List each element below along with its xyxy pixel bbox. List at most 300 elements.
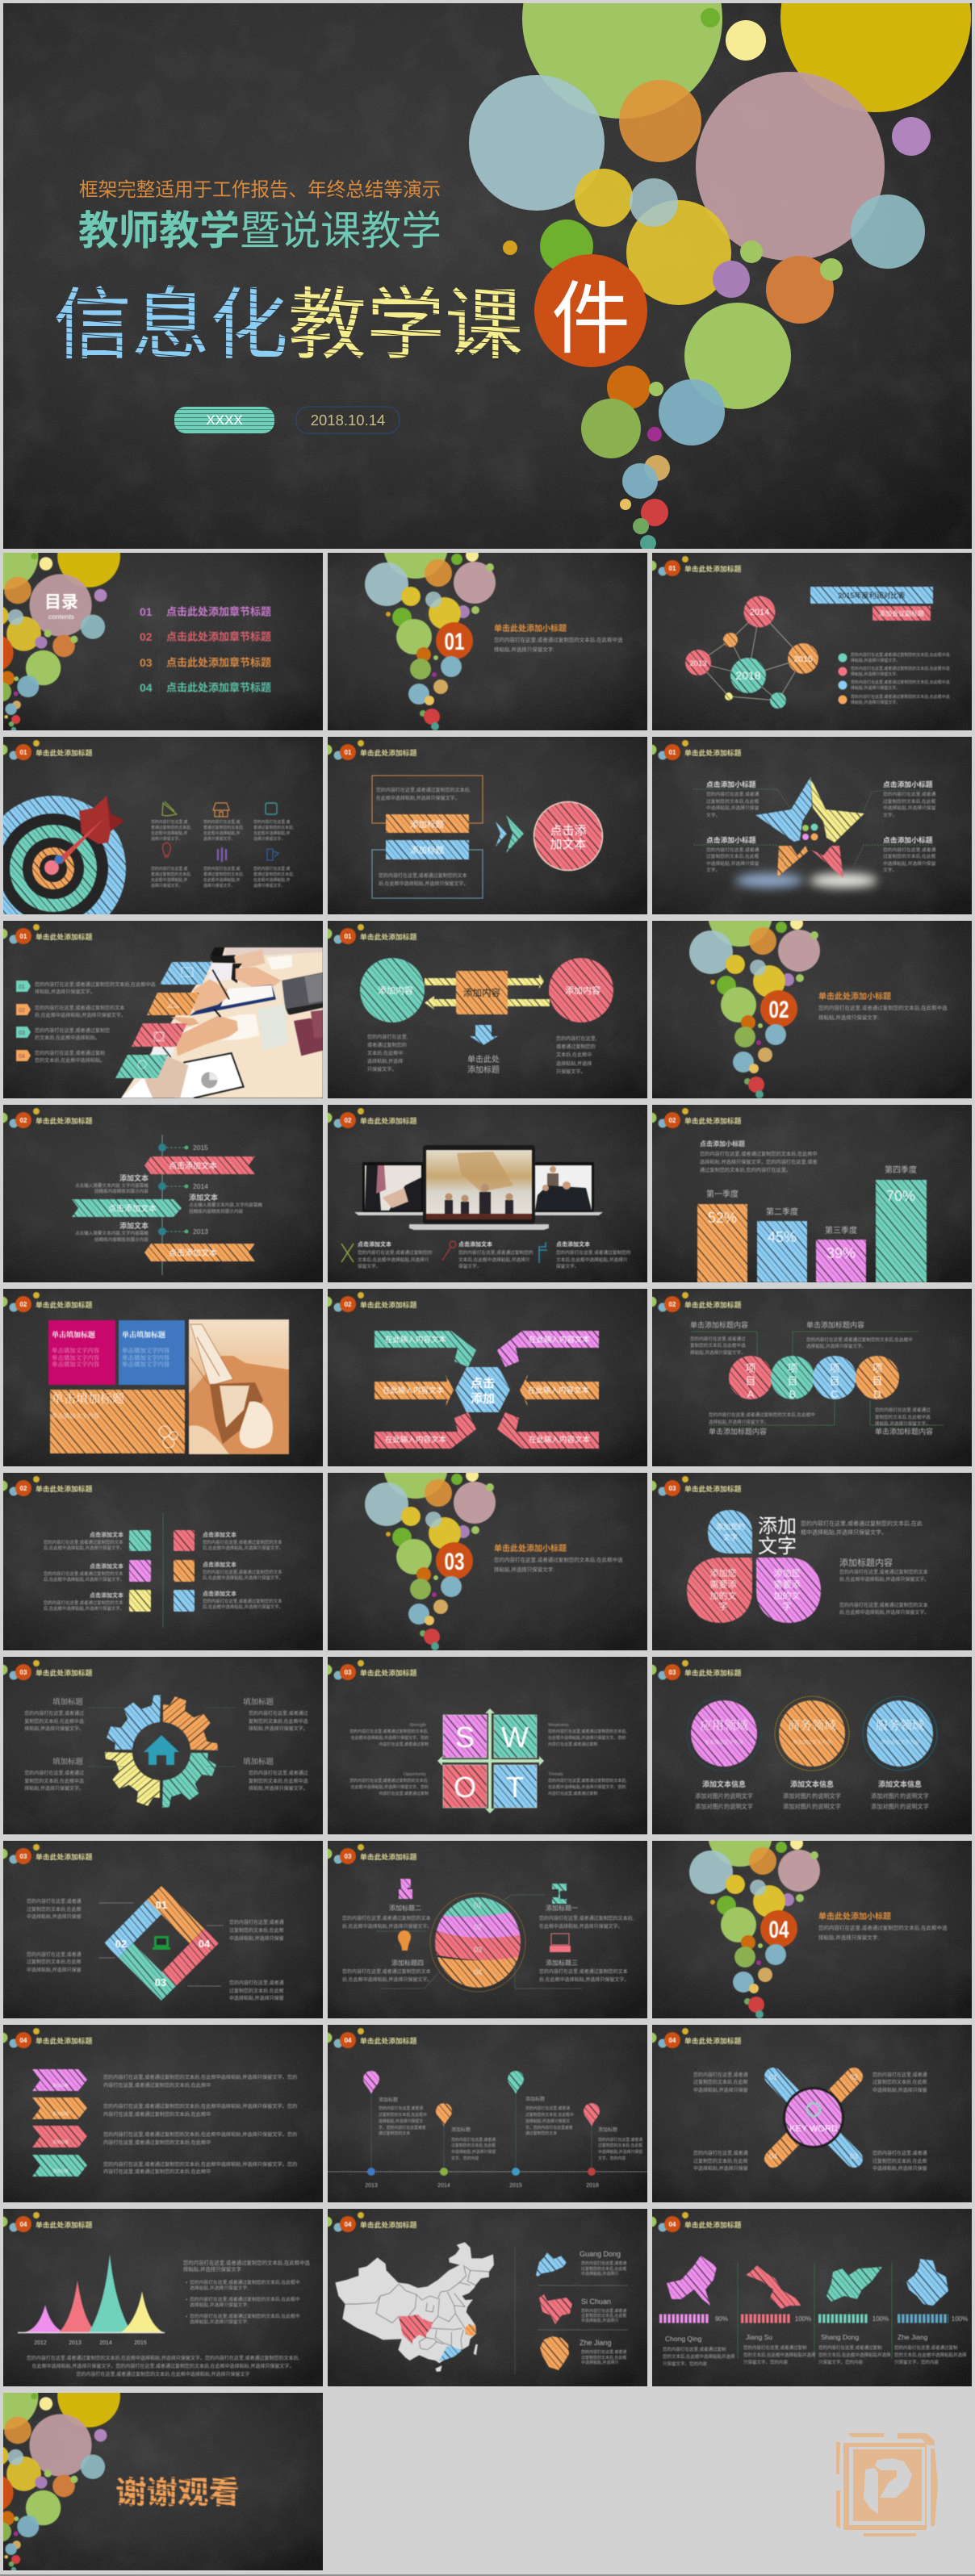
panel: thank you slide <box>0 2364 323 2572</box>
layered circle: 01 <box>474 1901 482 1909</box>
milestone 2018 text: 过复制您的文本后,在此框 <box>598 2143 642 2148</box>
panel: icon grid slide <box>0 1473 323 1650</box>
SWOT quadrants: W <box>501 1721 529 1754</box>
section number: 03 <box>444 1549 465 1575</box>
bottom left text <box>693 2150 748 2172</box>
slide header: 单击此处添加标题 <box>360 1852 417 1861</box>
text block 2014 right: 括精炼内容精炼到展示内容 <box>189 1208 244 1215</box>
region Shandong: 您的内容打在这里,或者通过复制 <box>818 2344 882 2351</box>
icon captions: 选择只保留文字。 <box>151 883 182 889</box>
right text: 您的内容打在这里, <box>556 1035 597 1042</box>
slide header <box>321 1660 417 1680</box>
left text rows: 后,在此框中选择粘贴,并选择只保留文字。 <box>44 1576 124 1583</box>
section number: 04 <box>768 1917 789 1943</box>
field captions: 添加对图片的说明文字 <box>695 1792 753 1800</box>
top description <box>801 1520 923 1536</box>
bottom left text: 点击添加小标题 <box>706 835 756 844</box>
arrow: pink bottom right <box>497 1412 599 1449</box>
bar chart: 第三季度 <box>825 1225 857 1236</box>
strength text: 您的内容打在这里,或者通过复制您的文本后, <box>349 1729 429 1734</box>
top left text: 中选择粘贴,并选择只保留 <box>693 2087 748 2093</box>
layered circle: 02 <box>474 1923 482 1931</box>
arrow: orange right: 在此输入内容文本 <box>528 1386 589 1395</box>
timeline years: 2015 <box>193 1144 208 1152</box>
field captions: 添加对图片的说明文字 <box>783 1792 841 1800</box>
legend list: 您的内容打在这里,或者通过复制您的文本后,在此框中选 <box>851 680 950 685</box>
slide header: 单击此处添加标题 <box>684 748 742 757</box>
orange centre box: 添加内容 <box>463 987 500 998</box>
top right callout: 单击添加标题内容 <box>806 1320 864 1329</box>
blue outline box: 后,在此框中选择粘贴,并选择只保留文字。 <box>379 880 468 887</box>
top right callout <box>806 1320 913 1349</box>
icon captions: 选择只保留文字。 <box>151 836 182 842</box>
top left callout: 择粘贴,并选择只保留文字。 <box>690 1349 746 1356</box>
left text rows: 后,在此框中选择粘贴,并选择只保留文字。 <box>44 1605 124 1612</box>
slide header <box>321 740 417 760</box>
orange outline box: 在此框中选择粘贴,并选择只保留文字。 <box>376 795 460 801</box>
years: 2014 <box>437 2183 450 2189</box>
circle callout: 点击添 <box>550 824 587 838</box>
opportunity text: 在此框中选择粘贴,并选择只保留文字。您的 <box>351 1784 429 1790</box>
section body text: 择粘贴,并选择只保留文字; <box>494 1566 554 1573</box>
main title last character in circle: 件 <box>551 274 630 363</box>
contents list: 02 <box>140 630 153 643</box>
milestone 2014 text: 中选择粘贴,并选择只保留 <box>451 2149 496 2155</box>
feature 2 text: 点击添加文本 <box>458 1240 492 1248</box>
pink ribbon: 点击添加文本 <box>169 1160 217 1171</box>
peak chart: 2014 <box>99 2340 112 2346</box>
heading one: 添加标题一 <box>546 1904 578 1912</box>
cross arms: 03 <box>850 2152 858 2160</box>
region Shandong: 100% <box>872 2315 889 2323</box>
slide header: 02 <box>20 1301 27 1308</box>
region Jiangsu <box>741 2265 816 2365</box>
bottom left text: 中选择粘贴,并选择只保留 <box>706 860 759 867</box>
right text rows: 点击添加文本 <box>203 1561 236 1568</box>
legend list: 择粘贴,并选择只保留文字。 <box>851 671 900 677</box>
list item 01: 01 <box>19 985 25 990</box>
list item 03: 的文本后,在此框中选择粘贴。 <box>35 1035 100 1041</box>
slide header: 单击此处添加标题 <box>684 564 742 573</box>
icon captions: 您的内容打在这里,或 <box>203 866 240 872</box>
panel: pin timeline slide <box>321 2025 647 2202</box>
bottom right text: 择粘贴,并选择只保留文字。 <box>249 1785 308 1792</box>
region Jiangsu: Jiang Su <box>746 2333 772 2341</box>
weakness text <box>548 1723 627 1747</box>
list item 03 <box>16 1027 110 1041</box>
slide header: 单击此处添加标题 <box>684 1300 742 1309</box>
feature 3 text <box>556 1240 631 1269</box>
region Zhejiang: 100% <box>952 2315 968 2323</box>
contents list: 点击此处添加章节标题 <box>166 657 271 668</box>
network nodes <box>685 596 818 709</box>
item circles: 目 <box>745 1375 756 1387</box>
slide header: 02 <box>345 1117 352 1124</box>
slide header <box>0 1292 93 1312</box>
slide header: 03 <box>20 1853 27 1860</box>
orange outline box: 您的内容打在这里,或者通过复制您的文本后, <box>376 787 471 793</box>
right text: 选择粘贴,并选择 <box>556 1060 592 1067</box>
petal: violet: 需要添 <box>773 1579 801 1590</box>
top right callout: 您的内容打在这里,或者通过复制您的文本后,在此框中 <box>806 1336 913 1343</box>
top right text: 中选择粘贴,并选择只保留 <box>883 805 936 811</box>
orange ribbon: 点击添加文本 <box>169 1248 217 1258</box>
panel: section 02 divider <box>652 882 972 1098</box>
right text rows: 点击添加文本 <box>203 1531 236 1538</box>
keyword ellipse <box>783 2087 844 2148</box>
icon: bell <box>162 801 177 816</box>
weakness text: 内容打在这里,或者通过复制 <box>548 1742 597 1747</box>
text block top left <box>27 1898 82 1920</box>
right text <box>556 1035 597 1075</box>
text block top left: 您的内容打在这里,或者通 <box>27 1898 82 1905</box>
item circles: B <box>789 1388 796 1400</box>
slide header <box>0 1476 93 1496</box>
peak chart <box>18 2254 165 2346</box>
top right text: 您的内容打在这里,或者通 <box>883 791 936 797</box>
left text rows: 您的内容打在这里,或者通过复制您的文本 <box>44 1600 123 1606</box>
heading one <box>539 1904 634 1930</box>
contents list: 点击此处添加章节标题 <box>166 631 271 642</box>
bottom right text: 您的内容打在这里,或者通过 <box>249 1770 308 1776</box>
right text rows: 后,在此框中选择粘贴,并选择只保留文字。 <box>203 1574 283 1581</box>
icon: cup <box>267 849 278 860</box>
petal: pink: 添加您 <box>710 1567 736 1579</box>
heading one: 在此框中选择粘贴,并选择只保留文字。 <box>539 1923 623 1930</box>
bottom left text <box>706 835 759 873</box>
field captions: 添加文本信息 <box>702 1779 746 1788</box>
diamond segments: 01 <box>156 1899 167 1911</box>
top right text <box>883 780 936 818</box>
icon: sliders <box>218 847 226 862</box>
thank you text: 谢谢观看 <box>115 2476 240 2511</box>
list item 01 <box>16 981 156 995</box>
text block bottom right: 中选择粘贴,并选择只保留 <box>229 1995 284 2001</box>
milestone 2014 text: 您的内容打在这里,或者通 <box>451 2137 496 2143</box>
milestone 2018 text: 中选择粘贴,并选择只保留 <box>598 2149 642 2155</box>
item circles: 项 <box>829 1362 840 1374</box>
cross arms: 01 <box>769 2073 777 2081</box>
bottom text: 在此框中选择粘贴,并选择只保留文字。您的内容打在这里,或者通过复制您的文本后,在此框中选择粘贴,并选择只保留文字。 <box>32 2363 294 2369</box>
list item 04: 您的内容打在这里,或者通过复制 <box>35 1050 105 1056</box>
slide header: 01 <box>20 933 27 940</box>
arrow: chevrons <box>496 815 524 853</box>
slide header <box>646 1660 742 1680</box>
bar chart: 70% <box>886 1188 915 1204</box>
left text rows: 您的内容打在这里,或者通过复制您的文本 <box>44 1539 123 1545</box>
item circles: 项 <box>745 1362 756 1374</box>
section heading: 单击此处添加小标题 <box>494 623 567 634</box>
SWOT quadrants: T <box>506 1771 524 1804</box>
petal: blue: 添加您的 <box>716 1522 745 1531</box>
bottom right text <box>243 1757 308 1792</box>
panel: quarterly bar chart slide <box>646 1105 972 1282</box>
section body text: 您的内容打在这里,或者通过复制您的文本后,在此框中选 <box>494 636 623 643</box>
bottom left callout: 您的内容打在这里,或者通过复制您的文本后,在此框中 <box>709 1411 815 1418</box>
bottom right text: 中选择粘贴,并选择只保留 <box>872 2165 927 2172</box>
chevron violet: 添加标题 <box>52 2083 69 2089</box>
text block 2013 left <box>75 1221 149 1243</box>
slide header <box>0 924 93 944</box>
feature 1 text: 文本后,在此框中选择粘贴,并选择只 <box>358 1257 429 1263</box>
timeline years <box>158 1144 208 1236</box>
chevron descriptions <box>103 2074 297 2175</box>
section body text: 您的内容打在这里,或者通过复制您的文本后,在此框中选 <box>818 1924 948 1931</box>
bottom right callout: 复制您的文本后,在此框中选 <box>875 1414 931 1420</box>
field captions <box>695 1779 929 1810</box>
slide header <box>321 924 417 944</box>
left text rows: 您的内容打在这里,或者通过复制您的文本 <box>44 1570 123 1577</box>
slide header <box>646 556 742 576</box>
gear segments <box>105 1695 218 1808</box>
milestone 2015 text: 通过复制您的文本 <box>525 2131 557 2136</box>
slide header: 02 <box>345 1301 352 1308</box>
bulleted text: • <box>186 2281 187 2285</box>
item circles: 目 <box>872 1375 883 1387</box>
section heading: 单击此处添加小标题 <box>818 1911 891 1922</box>
slide header <box>0 2028 93 2048</box>
blue block: 单击填加文字内容 <box>122 1361 170 1368</box>
feature 1 text: 您的内容打在这里,或者通过复制您的 <box>358 1249 433 1256</box>
bottom left text: 您的内容打在这里,或者通 <box>706 847 759 853</box>
chevron teal <box>32 2155 87 2177</box>
list item 01: 择粘贴,并选择只保留文字。 <box>35 989 95 995</box>
region Zhejiang: Zhe Jiang <box>898 2333 928 2341</box>
panel: keyword cross slide <box>646 2025 972 2202</box>
text block bottom right <box>229 1980 284 2001</box>
list item 02 <box>16 1004 126 1018</box>
SWOT quadrants: S <box>455 1721 475 1754</box>
text block top right: 中选择粘贴,并选择只保留 <box>229 1935 284 1942</box>
region Chongqing: 您的内容打在这里,或者通过复制 <box>663 2346 726 2352</box>
feature 3 text: 您的内容打在这里,或者通过复制您的 <box>556 1249 631 1256</box>
top right text <box>243 1697 308 1732</box>
slide header: 01 <box>20 749 27 756</box>
intro text: 您的内容打在这里,或者通过复制您的文本后,在此框中选 <box>183 2259 311 2266</box>
slide header: 单击此处添加标题 <box>36 2036 93 2045</box>
milestone 2014 text: 文字。您的内容 <box>451 2156 479 2161</box>
list item 03: 03 <box>19 1031 25 1036</box>
teal ribbon: 点击添加文本 <box>108 1203 157 1214</box>
bottom right text: 填加标题 <box>243 1757 274 1767</box>
top left text: 文字。 <box>706 812 720 818</box>
panel: SWOT slide <box>321 1657 647 1834</box>
text block bottom left <box>27 1951 82 1973</box>
chart description: 选择粘贴,并选择只保留文字。您的内容打在这里,或者 <box>700 1159 818 1165</box>
province Sichuan: 中选择粘贴,并选择只 <box>581 2318 618 2323</box>
bubble cluster <box>365 1434 496 1650</box>
right text rows: 后,在此框中选择粘贴,并选择只保留文字。 <box>203 1545 283 1551</box>
icon tiles <box>129 1530 195 1612</box>
green connectors <box>691 1332 944 1425</box>
pin stems <box>371 2094 592 2172</box>
list divider <box>538 2285 628 2330</box>
item circles: 目 <box>787 1375 798 1387</box>
column dividers <box>738 2262 892 2359</box>
right text: 或者通过复制您的 <box>556 1043 596 1050</box>
slide header: 单击此处添加标题 <box>36 1116 93 1125</box>
teal circle <box>360 958 425 1022</box>
slide header: 02 <box>669 1301 676 1308</box>
text block 2014 right: 点击输入简要文本内容,文字内容需概 <box>189 1202 262 1208</box>
blue block: 单击填加标题 <box>122 1330 165 1339</box>
list item 04 <box>16 1050 105 1064</box>
star glow <box>735 873 877 888</box>
slide header <box>321 1292 417 1312</box>
top left text: 过复制您的文本后,在此框 <box>706 798 759 805</box>
text block bottom right: 您的内容打在这里,或者通 <box>229 1980 284 1986</box>
bottom right callout: 您的内容打在这里,或者通过 <box>875 1407 931 1413</box>
icon: key <box>442 1241 456 1261</box>
feature 2 text: 保留文字。 <box>458 1263 481 1269</box>
bottom left text: 填加标题 <box>52 1757 83 1767</box>
arrow: violet top right: 在此输入内容文本 <box>529 1335 590 1344</box>
field circle: violet: 单击填加文字内容 <box>705 1739 743 1746</box>
left text: 选择粘贴,并选择 <box>367 1058 403 1064</box>
region Jiangsu: 100% <box>795 2315 811 2323</box>
field captions: 添加文本信息 <box>878 1779 922 1788</box>
orange label bar: 添加标题 <box>410 819 444 830</box>
orange block: 单击填加文字内容 <box>52 1412 100 1420</box>
item circles: 目 <box>829 1375 840 1387</box>
province Guangdong: Guang Dong <box>580 2250 621 2258</box>
region Chongqing: Chong Qing <box>665 2335 702 2343</box>
map dividers <box>514 2248 516 2374</box>
layered circle <box>429 1889 529 1996</box>
contents list <box>140 604 271 695</box>
left text: 文本后,在此框中 <box>367 1050 403 1056</box>
province Zhejiang: 您的内容打在这里,或者通 <box>581 2349 626 2355</box>
opportunity text: Opportunity <box>404 1772 426 1777</box>
text block bottom left: 中选择粘贴,并选择只保留 <box>27 1967 82 1973</box>
section body text: 您的内容打在这里,或者通过复制您的文本后,在此框中选 <box>818 1004 948 1011</box>
text block 2014 left: 点击输入简要文本内容,文字内容需概 <box>75 1182 149 1189</box>
magenta block: 单击填加文字内容 <box>52 1361 100 1368</box>
SWOT quadrants <box>443 1715 537 1808</box>
weakness text: 在此框中选择粘贴,并选择只保留文字。您的 <box>548 1735 626 1741</box>
blue ribbon: 2015年度利润对比表 <box>838 591 906 600</box>
centre hexagon: 添加 <box>471 1392 495 1406</box>
icon captions <box>151 819 294 889</box>
orange label bar <box>386 814 469 833</box>
icon captions: 您的内容打在这里,或 <box>151 819 187 825</box>
slide header: 04 <box>345 2221 352 2228</box>
bar chart: 第一季度 <box>706 1189 739 1199</box>
chevron descriptions: 您的内容打在这里,或者通过复制您的文本后,在此框中选择粘贴,并选择只保留文字。您的 <box>103 2074 297 2080</box>
milestone 2013 text: 选择粘贴,并选择只保留文 <box>379 2118 423 2124</box>
icon captions: 者通过复制您的文本后, <box>151 825 191 830</box>
slide header: 03 <box>20 1669 27 1676</box>
icon: monitor <box>153 1936 170 1950</box>
legend list: 择粘贴,并选择只保留文字。 <box>851 658 900 663</box>
threats text: 内容打在这里,或者通过复制 <box>548 1791 597 1796</box>
top left text: 您的内容打在这里,或者通过 <box>24 1710 84 1717</box>
bulleted text: 您的内容打在这里,或者通过复制您的文本后,在此框中 <box>190 2279 300 2285</box>
diamond segments: 03 <box>155 1976 166 1988</box>
panel: layered globe slide <box>321 1841 647 2018</box>
centre hexagon <box>455 1367 510 1412</box>
cross arms: 04 <box>769 2152 777 2160</box>
slide header: 01 <box>669 565 676 572</box>
region Chongqing: 90% <box>715 2315 728 2323</box>
milestone 2018 text <box>598 2126 642 2161</box>
slide header <box>646 740 742 760</box>
threats text <box>548 1772 627 1796</box>
slide header: 02 <box>669 1117 676 1124</box>
bottom right text: 文字。 <box>883 867 897 873</box>
right text rows: 您的内容打在这里,或者通过复制您的文本 <box>203 1598 282 1604</box>
panel: gear slide <box>0 1657 323 1834</box>
heading two <box>342 1904 432 1930</box>
right text: 文本后,在此框中 <box>556 1052 592 1058</box>
bottom left callout: 单击添加标题内容 <box>709 1427 767 1436</box>
field captions: 添加对图片的说明文字 <box>871 1803 929 1810</box>
text block 2013 left: 括精炼内容精炼到展示内容 <box>94 1236 149 1243</box>
panel: three fields slide <box>646 1657 972 1834</box>
slide header <box>0 1108 93 1128</box>
slide header: 04 <box>20 2221 27 2228</box>
peak chart: 2015 <box>134 2340 147 2346</box>
milestone 2014 text: 过复制您的文本后,在此框 <box>451 2143 496 2148</box>
heading three: 后,在此框中选择粘贴,并选择只保留文字。 <box>539 1976 629 1983</box>
top left text: 您的内容打在这里,或者通 <box>693 2072 748 2078</box>
milestone 2013 text: 添加标题 <box>379 2097 398 2103</box>
contents list: 03 <box>140 656 153 669</box>
blue block <box>119 1320 185 1385</box>
timeline axis <box>328 2171 647 2172</box>
name pill: XXXX <box>206 412 243 428</box>
bubble cluster <box>364 553 496 730</box>
left text <box>367 1034 408 1073</box>
top left text: 过复制您的文本后,在此框 <box>693 2079 748 2085</box>
connector lines <box>376 1895 583 1988</box>
panel: chevron list slide <box>0 2025 323 2202</box>
chevron descriptions: 内容打在这里,或者通过复制您的文本后,在此框中 <box>103 2111 211 2118</box>
icon captions: 者通过复制您的文本后, <box>253 825 294 830</box>
icon: people violet <box>399 1879 412 1899</box>
circle callout <box>534 802 602 870</box>
petal: pink: 字 <box>718 1600 728 1612</box>
icon: house <box>144 1735 179 1765</box>
network nodes: 2018 <box>735 669 761 682</box>
slide header <box>321 1108 417 1128</box>
petal: pink: 加的文 <box>710 1590 736 1601</box>
icon: watermark stamp <box>836 2433 938 2536</box>
bottom right text: 复制您的文本后,在此框中选 <box>249 1778 308 1784</box>
icon: recycle teal <box>552 1884 567 1904</box>
slide header: 单击此处添加标题 <box>36 1668 93 1677</box>
province Guangdong: 您的内容打在这里,或者通 <box>581 2260 626 2266</box>
icon: shop <box>213 803 229 817</box>
orange centre box <box>456 971 508 1014</box>
bottom left text: 过复制您的文本后,在此框 <box>693 2158 748 2164</box>
milestone 2018 text: 您的内容打在这里,或者通 <box>598 2137 642 2143</box>
SWOT quadrants: O <box>454 1771 476 1804</box>
magenta block: 单击填加文字内容 <box>52 1354 100 1361</box>
region Shandong <box>818 2267 891 2365</box>
left text rows <box>44 1531 124 1612</box>
orange outline box <box>372 776 483 823</box>
timeline years: 2014 <box>193 1182 208 1190</box>
arrow: teal top left <box>375 1331 476 1367</box>
text block bottom left: 您的内容打在这里,或者通 <box>27 1951 82 1958</box>
centre hexagon: 点击 <box>471 1376 495 1390</box>
arrow: violet top right <box>497 1331 599 1367</box>
petal: blue: 文字 <box>723 1533 738 1541</box>
chevron descriptions: 您的内容打在这里,或者通过复制您的文本后,在此框中选择粘贴,并选择只保留文字。您的 <box>103 2103 297 2110</box>
orange block <box>50 1390 185 1453</box>
milestone 2015 text <box>525 2096 574 2136</box>
